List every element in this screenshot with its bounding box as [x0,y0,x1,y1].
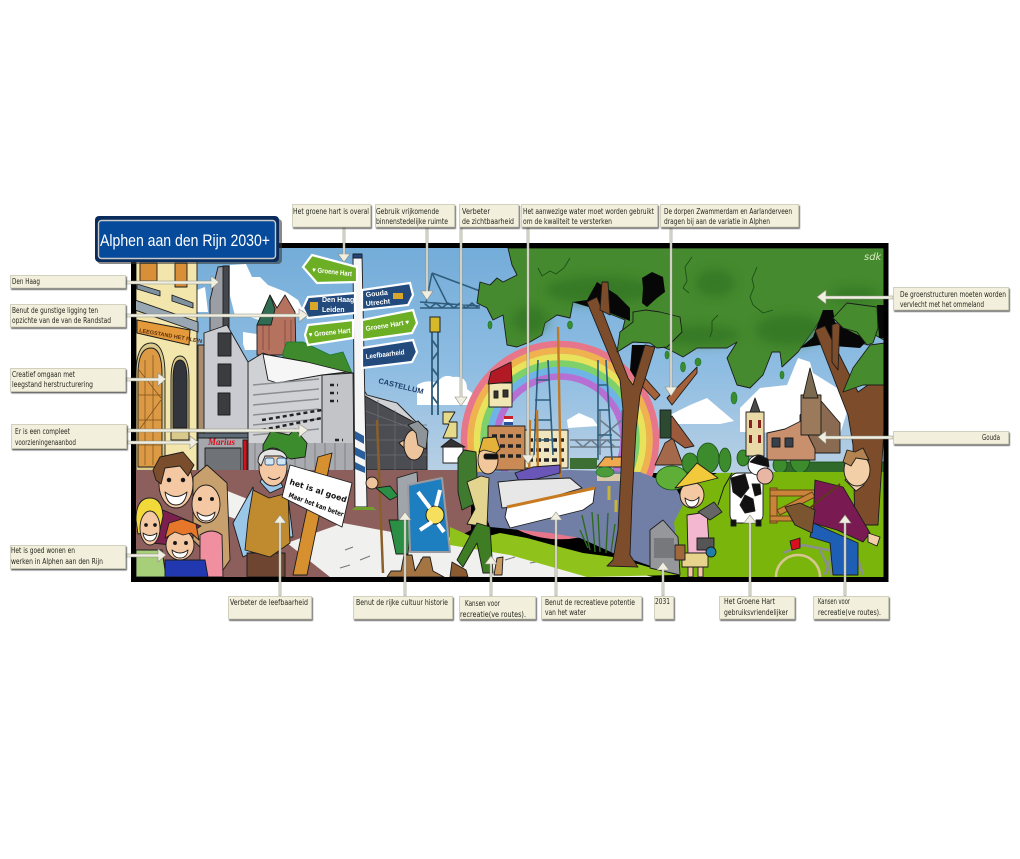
light bush [656,466,688,490]
label: kansen recreatie [460,596,536,619]
label: leefbaarheid: Verbeter de leefbaarheid [230,598,308,607]
canopy: large tree crowns [477,248,884,388]
sign: Groene Hart right: Groene Hart ♥ [365,319,410,333]
family [136,452,230,577]
label: wonen en werken: werken in Alphen aan den Rijn [11,557,103,566]
ground [136,470,471,577]
label: aanwezige water: om de kwaliteit te versterken [523,217,612,226]
grass tuft [352,507,376,510]
label: dorpen: dragen bij aan de variatie in Alphen [664,217,770,226]
label: recreatieve potentie [542,596,642,619]
label: recreatieve potentie: van het water [545,608,587,617]
shop: Marius [198,432,248,470]
building: yellow shop [136,262,202,470]
arrow: Gouda [818,431,893,444]
label: dorpen [660,204,798,227]
dark foliage shadow [573,272,885,378]
roman soldier [366,420,450,577]
arrow: recreatie routes [485,556,497,596]
sign: Leefbaarheid: Leefbaarheid [365,349,405,361]
fence [770,488,817,523]
label: gunstige ligging: opzichte van de van de Randstad [12,316,111,325]
protest sign [282,453,352,575]
label: Groene Hart [720,596,794,619]
label: kansen recreatie: Kansen voor [465,599,501,608]
label: leegstand [10,368,126,392]
hedge and small trees [682,443,885,474]
sign: Groene Hart top: ♥ Groene Hart [312,267,353,278]
label: wonen en werken [10,546,126,568]
label: zichtbaarheid: de zichtbaarheid [462,217,514,226]
label: groenstructuren: vervlecht met het ommeland [900,300,984,309]
right tree trunk [815,326,884,525]
milestone 2031 [650,520,680,575]
lower left crown [617,310,682,352]
label: wonen en werken: Het is goed wonen en [11,546,75,555]
signpost: pole [353,254,367,507]
frame [134,246,886,580]
label: aanwezige water: Het aanwezige water moet worden gebruikt [523,207,654,216]
arrow: voorzieningen lower [127,436,198,449]
father [152,510,201,545]
label: cultuur historie: Benut de rijke cultuur historie [356,598,448,607]
mother [193,465,230,570]
older man [233,429,307,577]
arrow: recreatieve potentie [550,512,562,596]
boy [165,560,208,577]
canopy shading [512,269,880,346]
arrow: leefbaarheid [274,515,286,596]
sign: Den Haag Leiden [303,293,355,318]
arrow: wonen [126,549,166,562]
water [470,470,690,575]
signature: sdk [864,252,883,263]
sign: Gouda Utrecht: Gouda [365,290,388,299]
arrow: zichtbaarheid [455,227,467,406]
lower wall [247,443,353,470]
label: 2031: 2031 [655,597,670,606]
right field [674,472,885,577]
label: kansen recreatie right: Kansen voor [818,597,851,606]
cyclist [776,448,880,599]
far bank and steel bridge [570,410,622,455]
label: zichtbaarheid: Verbeter [462,207,491,216]
arrow: Randstad [126,309,308,322]
hiker [450,437,503,577]
label: Groene Hart: gebruiksvriendelijker [724,608,789,617]
label: vrijkomende ruimte: binnenstedelijke ruimte [376,217,448,226]
arrow: groene hart overal [338,227,350,262]
sign: Den Haag Leiden: Leiden [322,307,345,314]
label: Gouda [894,432,1008,444]
label: groene hart overal [292,204,370,227]
label: kansen recreatie: recreatie(ve routes). [460,610,526,619]
sign: Den Haag Leiden: Den Haag [322,297,354,304]
tourist [675,463,722,577]
arrow: dorpen [665,227,677,396]
arrow: recreatie routes right [839,515,851,596]
arrow: cultuur historie [399,512,411,596]
sign: Gouda Utrecht [362,283,413,310]
arrow: Groene Hart vriendelijk [744,515,756,596]
label: leegstand: Creatief omgaan met [12,370,75,379]
house on the rainbow [488,362,512,407]
arrow: water [522,227,534,464]
main tree trunk [587,297,655,567]
label: Groene Hart: Het Groene Hart [724,597,775,606]
cow [718,455,773,526]
girl [136,498,163,534]
protest sign: Maar het kan beter [287,491,345,519]
shop: Marius: Marius [207,437,236,447]
arrow: vrijkomende ruimte [421,227,433,300]
cranes on the quay [534,360,612,460]
label: vrijkomende ruimte [376,204,454,227]
windmill [640,367,697,465]
arrow: Den Haag [126,276,219,289]
label: cultuur historie [354,596,452,619]
label: zichtbaarheid [460,204,518,227]
distant brick towers [257,295,296,355]
clouds [197,264,847,434]
label: 2031 [654,596,674,619]
factory and quay [441,412,568,470]
small right tree [843,343,885,392]
building: castellum [248,353,427,471]
label: voorzieningen [12,424,126,448]
building: castellum: CASTELLUM [378,376,425,396]
reeds [580,512,615,553]
sky [136,248,885,473]
title sign: Alphen aan den Rijn 2030+ [100,232,270,250]
flag [504,416,513,425]
label: Den Haag: Den Haag [12,277,40,286]
distant skyscraper [210,266,229,336]
right sub crown [833,303,878,345]
label: kansen recreatie right: recreatie(ve routes). [818,608,881,617]
arrow: leegstand [126,373,166,386]
label: kansen recreatie right [814,596,888,619]
falling leaves [488,321,784,404]
label: groene hart overal: Het groene hart is overal [293,207,369,216]
rainbow [464,344,656,536]
label: vrijkomende ruimte: Gebruik vrijkomende [376,207,439,216]
label: dorpen: De dorpen Zwammerdam en Aarlanderveen [664,207,792,216]
churches [746,368,840,460]
label: voorzieningen: Er is een compleet [15,427,70,436]
canopy detail strokes [538,257,773,337]
sign: Groene Hart lower: ♥ Groene Hart [308,328,352,339]
label: Den Haag [10,276,126,288]
arrow: voorzieningen upper [127,424,308,437]
arrow: groenstructuren [817,290,893,304]
title sign [95,216,282,264]
arrow: 2031 [657,562,669,596]
label: Gouda: Gouda [982,433,1000,442]
label: groenstructuren [894,288,1008,310]
sign: Gouda Utrecht: Utrecht [365,298,391,308]
building: grey block [198,325,248,473]
signs [303,255,417,368]
label: gunstige ligging [10,304,126,327]
bushes behind castellum [283,342,352,373]
label: leefbaarheid [228,596,312,619]
label: leegstand: leegstand herstructurering [12,380,93,389]
protest sign: het is al goed [288,477,348,504]
building: yellow shop: LEEGSTAND HET PLEIN [139,328,203,345]
grass strip [450,527,677,577]
label: voorzieningen: voorzieningenaanbod [15,438,76,447]
label: gunstige ligging: Benut de gunstige ligging ten [12,306,98,315]
building crane [420,273,480,415]
boat [498,327,595,528]
label: aanwezige water [522,204,658,227]
panel: illustrated scene [133,244,888,599]
label: recreatieve potentie: Benut de recreatieve potentie [545,598,635,607]
